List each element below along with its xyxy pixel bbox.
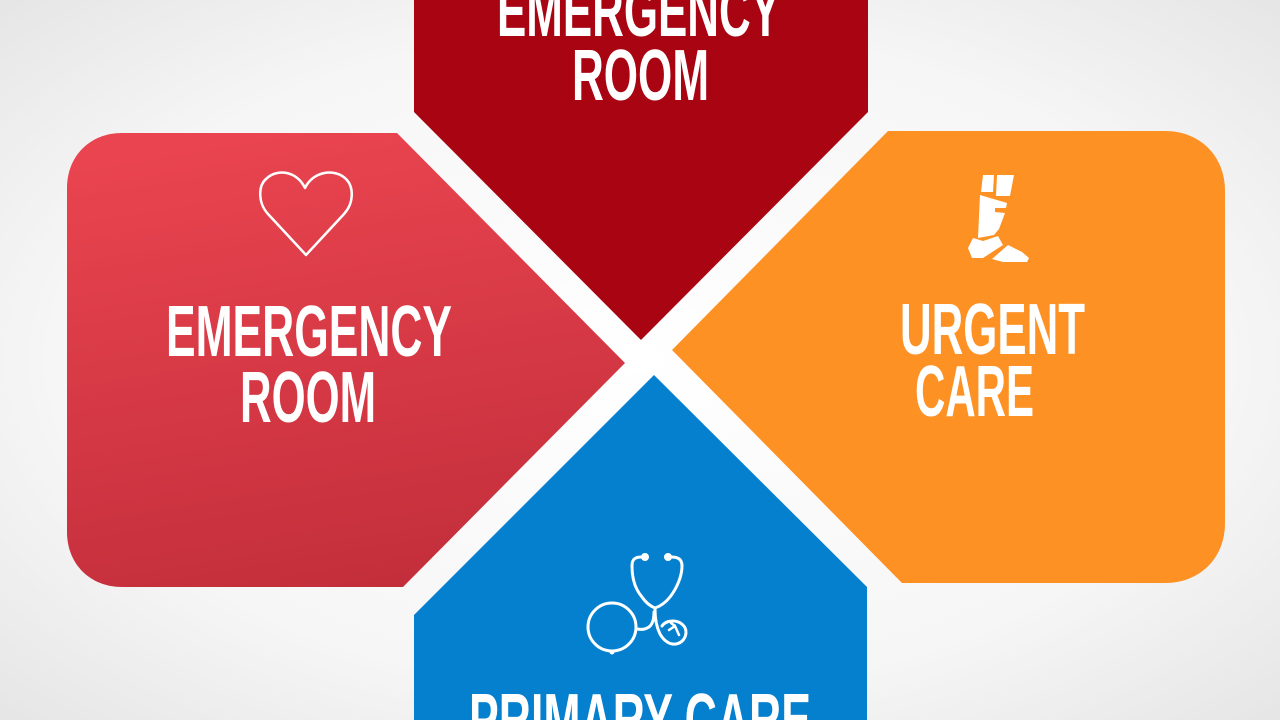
heading: top emergency room — [497, 0, 780, 116]
panel: urgent care — [672, 131, 1225, 583]
heading: urgent care — [900, 290, 1085, 432]
icon: stethoscope — [588, 554, 686, 654]
heading: urgent care: CARE — [915, 352, 1034, 432]
icon: heart — [260, 173, 352, 255]
icon: bandaged ankle — [968, 175, 1029, 262]
heading: left emergency room: EMERGENCY — [166, 292, 452, 372]
heading: left emergency room: ROOM — [240, 358, 376, 438]
heading: left emergency room — [166, 292, 452, 438]
panel: top emergency room — [414, 0, 868, 340]
heading: top emergency room: ROOM — [572, 36, 709, 116]
panel: left emergency room — [67, 133, 625, 587]
panel: primary care — [414, 375, 867, 720]
heading: urgent care: URGENT — [900, 290, 1085, 370]
